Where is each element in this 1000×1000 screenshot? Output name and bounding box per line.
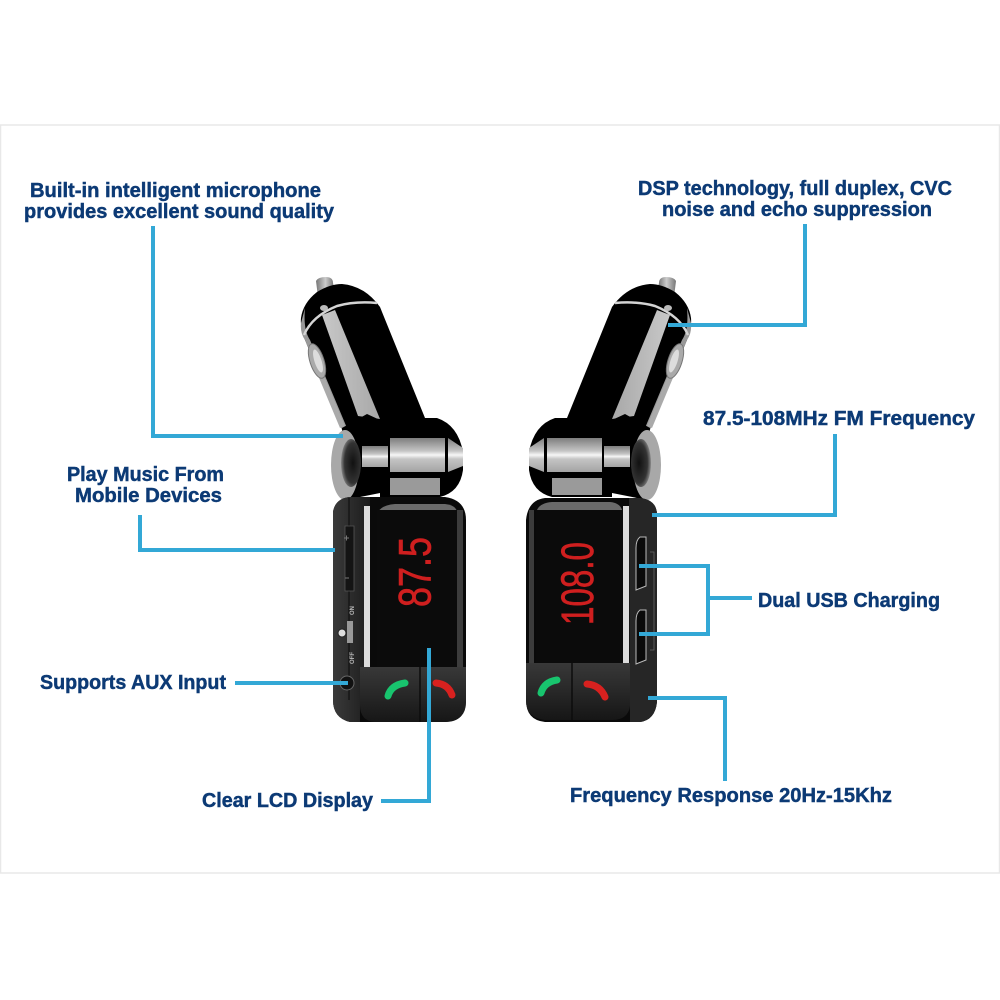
left side controls: ON — [350, 606, 356, 615]
right plug — [567, 277, 691, 432]
right LCD screen — [536, 510, 623, 663]
leader line: AUX — [235, 681, 348, 685]
left hinge — [331, 414, 463, 500]
right hinge — [529, 414, 661, 500]
leader line: play music — [140, 515, 335, 550]
label: microphone — [24, 180, 335, 223]
right call buttons — [526, 663, 630, 720]
label: play music: Play Music From — [67, 464, 224, 486]
label: dual USB: Dual USB Charging — [758, 590, 940, 612]
leader line: microphone — [153, 226, 343, 436]
icon: red hang-up handset — [436, 683, 452, 695]
right body — [526, 498, 657, 722]
icon: green call handset — [388, 683, 405, 696]
left LCD screen — [377, 510, 457, 667]
left side controls: OFF — [350, 652, 356, 664]
panel: framed background — [0, 125, 1000, 873]
leader line: LCD — [381, 648, 429, 801]
icon: red hang-up handset right — [587, 684, 605, 697]
label: LCD: Clear LCD Display — [202, 790, 374, 812]
label: DSP — [638, 178, 952, 221]
leader line: DSP — [668, 224, 805, 325]
label: play music: Mobile Devices — [75, 485, 222, 507]
leader line: dual USB — [639, 566, 752, 634]
left frequency readout: 87.5 — [390, 537, 440, 607]
left side controls — [338, 526, 356, 690]
label: play music — [67, 464, 224, 507]
label: microphone: Built-in intelligent microphone — [30, 180, 321, 202]
left body — [333, 497, 466, 722]
icon: green call handset right — [541, 680, 557, 693]
device: right transmitter — [526, 277, 691, 722]
label: FM frequency: 87.5-108MHz FM Frequency — [703, 408, 976, 430]
leader line: FM frequency — [652, 434, 835, 515]
left call buttons — [360, 667, 466, 722]
label: DSP: noise and echo suppression — [662, 199, 932, 221]
device: left transmitter — [301, 277, 466, 722]
leader line: frequency response — [648, 698, 725, 781]
label: DSP: DSP technology, full duplex, CVC — [638, 178, 952, 200]
label: AUX: Supports AUX Input — [40, 672, 226, 694]
right frequency readout: 108.0 — [552, 542, 603, 625]
label: microphone: provides excellent sound quality — [24, 201, 335, 223]
right USB ports — [636, 537, 654, 664]
left plug — [301, 277, 425, 432]
label: frequency response: Frequency Response 20Hz-15Khz — [570, 785, 892, 807]
